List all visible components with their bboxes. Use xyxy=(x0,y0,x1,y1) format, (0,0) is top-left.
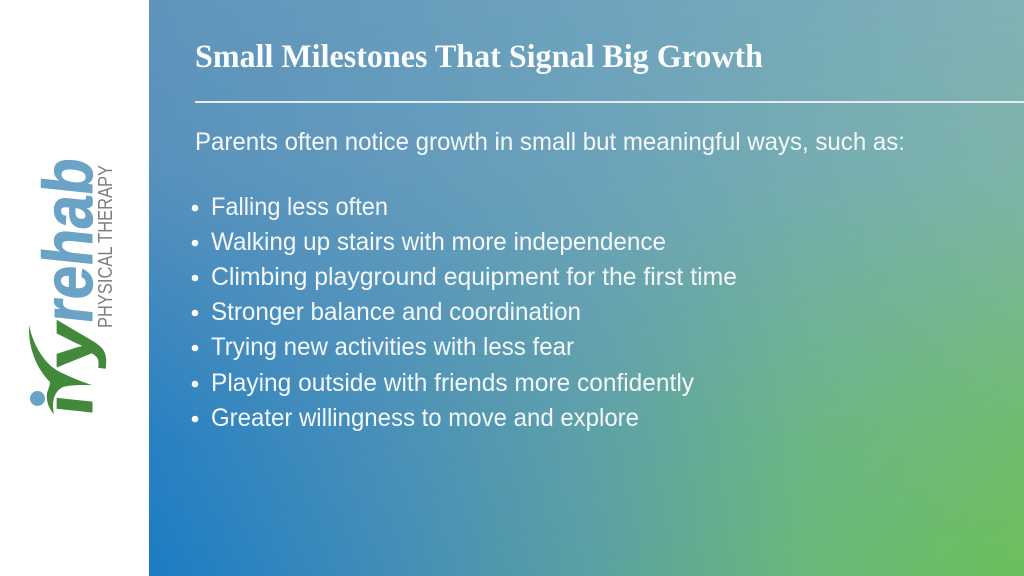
bullet: trying new activities: Trying new activities with less fear xyxy=(211,333,574,361)
logo tagline: PHYSICAL THERAPY xyxy=(95,165,117,328)
intro text: Parents often notice growth in small but meaningful ways, such as: xyxy=(195,128,905,156)
logo: Ivy Rehab Physical Therapy xyxy=(28,153,117,419)
bullet: climbing playground equipment: Climbing playground equipment for the first time xyxy=(211,263,737,291)
bullet: falling less often: Falling less often xyxy=(211,193,388,221)
logo wordmark: i: i xyxy=(33,391,107,419)
bullet: greater willingness: Greater willingness to move and explore xyxy=(211,404,639,432)
logo wordmark: rehab: rehab xyxy=(28,153,107,327)
logo icon: blue dot xyxy=(30,391,45,406)
title divider xyxy=(195,101,1024,103)
logo wordmark: y: y xyxy=(33,318,107,373)
title: Small Milestones That Signal Big Growth xyxy=(195,39,763,75)
white sidebar xyxy=(0,0,149,576)
bullet: playing outside: Playing outside with friends more confidently xyxy=(211,369,694,397)
bullet list xyxy=(192,193,737,432)
logo icon: green swoosh xyxy=(29,325,92,414)
bullet: stronger balance: Stronger balance and coordination xyxy=(211,298,581,326)
bullet: walking up stairs: Walking up stairs with more independence xyxy=(211,228,666,256)
